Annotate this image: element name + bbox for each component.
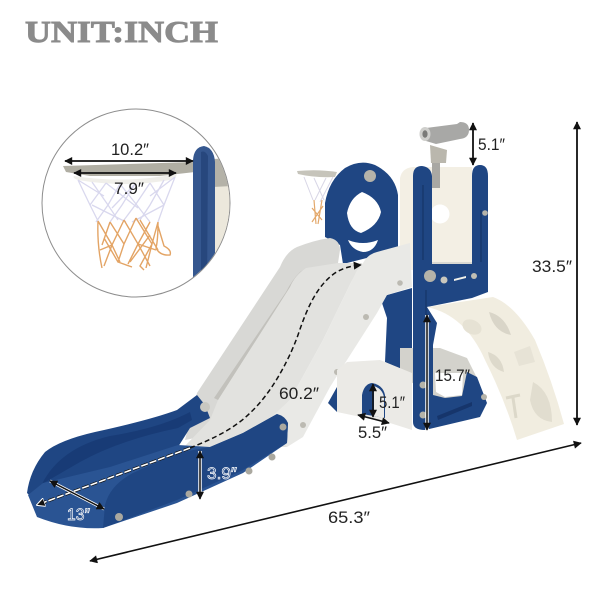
dimension: arch width 5.5: 5.5″ <box>358 423 387 442</box>
dimension: rail height 3.9 <box>200 451 237 499</box>
slide chute <box>184 238 412 447</box>
dimension: slide length 60.2: 60.2″ <box>279 384 319 403</box>
dimension: slide width 13 <box>50 481 104 524</box>
climbing ramp <box>427 297 564 440</box>
cream tower panel <box>400 167 472 270</box>
dimension: total height 33.5: 33.5″ <box>532 257 572 276</box>
dimension: arch height 5.1 <box>373 384 405 417</box>
dimension: platform height 15.7: 15.7″ <box>435 366 470 385</box>
slide blue end: back rail <box>27 395 210 505</box>
blue back panel with holes <box>325 163 398 264</box>
dimension: rim inner 7.9 <box>74 173 176 198</box>
dimension: total length 65.3: 65.3″ <box>328 508 370 527</box>
slide blue end: lip and front rail <box>28 414 288 528</box>
dimension: total length 65.3 <box>90 443 581 561</box>
tower blue front frame <box>413 165 488 430</box>
dimension: rim inner 7.9: 7.9″ <box>114 179 144 198</box>
inset: basketball hoop detail <box>42 109 232 297</box>
telescope <box>420 122 469 188</box>
title: UNIT:INCH <box>25 14 218 49</box>
tower platform <box>432 262 472 268</box>
dimension: arch height 5.1: 5.1″ <box>379 393 405 412</box>
dimension: slide width 13: 13″ <box>67 505 90 524</box>
lower back leg and panel <box>380 288 477 398</box>
tower panel hole <box>430 204 450 224</box>
back panel bolt <box>364 170 376 182</box>
slide base step with arch <box>328 360 412 430</box>
small hoop on slide <box>297 170 337 224</box>
dimension: platform height 15.7 <box>427 315 470 430</box>
dimension: telescope height 5.1 <box>473 123 505 165</box>
dimension: arch width 5.5 <box>358 415 389 442</box>
dimension: rim outer 10.2: 10.2″ <box>111 140 149 159</box>
dimension: slide length 60.2 <box>37 265 361 505</box>
opening under tower <box>435 373 463 397</box>
dimension: rail height 3.9: 3.9″ <box>207 464 237 483</box>
dimension: rim outer 10.2 <box>65 140 193 161</box>
dimension: telescope height 5.1: 5.1″ <box>478 135 505 154</box>
